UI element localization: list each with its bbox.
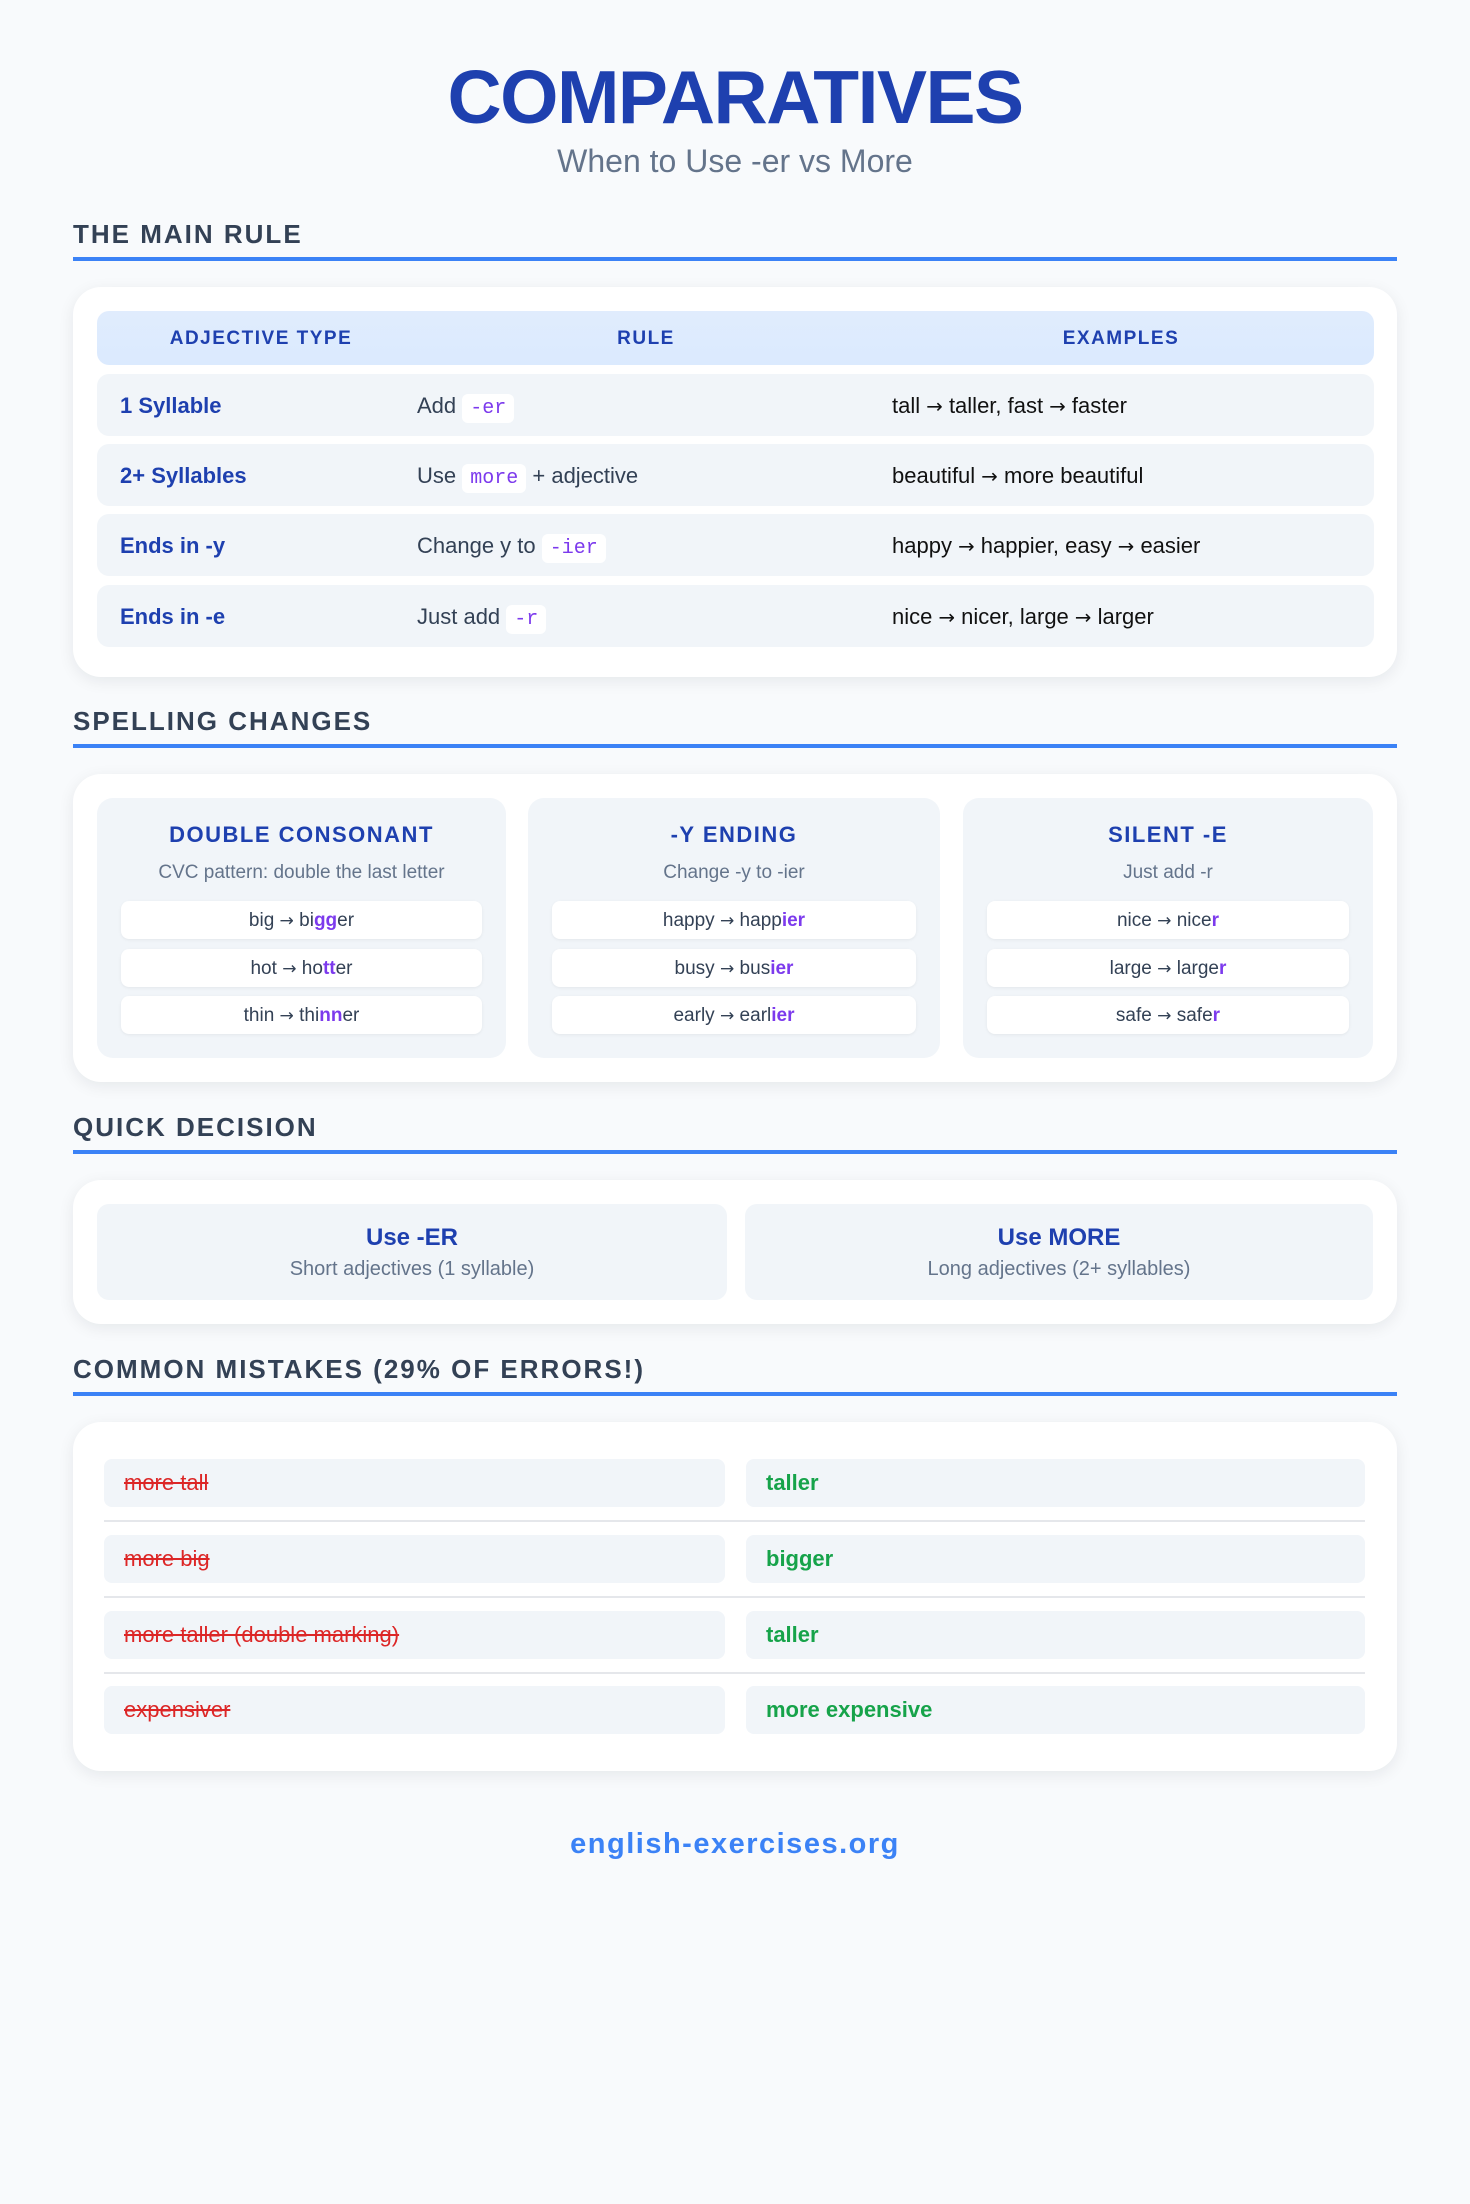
card: -y ending (528, 798, 940, 1058)
heading: spelling changes: SPELLING CHANGES (73, 706, 372, 736)
table header: RULE (617, 328, 675, 349)
card: double consonant: DOUBLE CONSONANT (169, 822, 434, 847)
card: -y ending: Change -y to -ier (663, 862, 805, 883)
mistake row 3: taller (766, 1622, 819, 1647)
row: ends in -y: happy → happier, easy → easier (892, 533, 1200, 558)
card: silent -e: SILENT -E (1108, 822, 1228, 847)
heading: the main rule: THE MAIN RULE (73, 219, 303, 249)
card: double consonant: CVC pattern: double the last letter (158, 862, 445, 883)
panel: main rule table (73, 287, 1397, 677)
card: double consonant: big → bigger (249, 910, 354, 931)
subtitle: When to Use -er vs More (557, 143, 913, 179)
table header (97, 311, 1374, 365)
card: silent -e: nice → nicer (1117, 910, 1219, 931)
card: silent -e: Just add -r (1123, 862, 1213, 883)
row: 2+ syllables: Use more + adjective (417, 463, 638, 490)
row: ends in -y: Change y to -ier (417, 533, 598, 560)
row: ends in -e (97, 585, 1374, 647)
box: use -er: Short adjectives (1 syllable) (290, 1258, 534, 1280)
row: 1 syllable: tall → taller, fast → faster (892, 393, 1127, 418)
box: use more: Use MORE (998, 1224, 1120, 1251)
table header: ADJECTIVE TYPE (170, 328, 352, 349)
row: 1 syllable: 1 Syllable (120, 393, 222, 418)
mistake row 1 (104, 1459, 1365, 1507)
heading: spelling changes (73, 706, 1397, 748)
box: use -er: Use -ER (366, 1224, 458, 1251)
card: double consonant: thin → thinner (244, 1005, 359, 1026)
card: -y ending: happy → happier (663, 910, 805, 931)
heading: the main rule (73, 219, 1397, 261)
card: silent -e: safe → safer (1116, 1005, 1220, 1026)
heading: common mistakes (73, 1354, 1397, 1396)
mistake row 1: taller (766, 1470, 819, 1495)
card: double consonant: hot → hotter (250, 958, 352, 979)
mistake row 2: bigger (766, 1546, 833, 1571)
panel: spelling changes (73, 774, 1397, 1082)
row: 1 syllable: Add -er (417, 393, 506, 420)
heading: common mistakes: COMMON MISTAKES (29% OF ERRORS!) (73, 1354, 645, 1384)
mistake row 4: more expensive (766, 1697, 932, 1722)
mistake row 2 (104, 1535, 1365, 1583)
mistake row 3 (104, 1611, 1365, 1659)
footer: english-exercises.org (570, 1828, 900, 1860)
row: 2+ syllables: beautiful → more beautiful (892, 463, 1143, 488)
card: -y ending: busy → busier (675, 958, 793, 979)
row: ends in -e: nice → nicer, large → larger (892, 604, 1154, 629)
card: -y ending: -Y ENDING (671, 822, 797, 847)
box: use more: Long adjectives (2+ syllables) (928, 1258, 1190, 1280)
box: use -er (97, 1204, 727, 1300)
row: ends in -y: Ends in -y (120, 533, 225, 558)
row: ends in -y (97, 514, 1374, 576)
mistake row 3: more taller (double marking) (124, 1622, 399, 1647)
card: silent -e: large → larger (1110, 958, 1226, 979)
row: ends in -e: Ends in -e (120, 604, 225, 629)
box: use more (745, 1204, 1373, 1300)
row: 2+ syllables: 2+ Syllables (120, 463, 247, 488)
row: ends in -e: Just add -r (417, 604, 538, 631)
card: silent -e (963, 798, 1373, 1058)
table header: EXAMPLES (1063, 328, 1179, 349)
panel: common mistakes (73, 1422, 1397, 1771)
heading: quick decision (73, 1112, 1397, 1154)
card: -y ending: early → earlier (673, 1005, 794, 1026)
mistake row 1: more tall (124, 1470, 208, 1495)
mistake row 4: expensiver (124, 1697, 230, 1722)
panel: quick decision (73, 1180, 1397, 1324)
title: COMPARATIVES (447, 55, 1023, 139)
row: 2+ syllables (97, 444, 1374, 506)
mistake row 2: more big (124, 1546, 210, 1571)
card: double consonant (97, 798, 506, 1058)
row: 1 syllable (97, 374, 1374, 436)
mistake row 4 (104, 1686, 1365, 1734)
heading: quick decision: QUICK DECISION (73, 1112, 318, 1142)
